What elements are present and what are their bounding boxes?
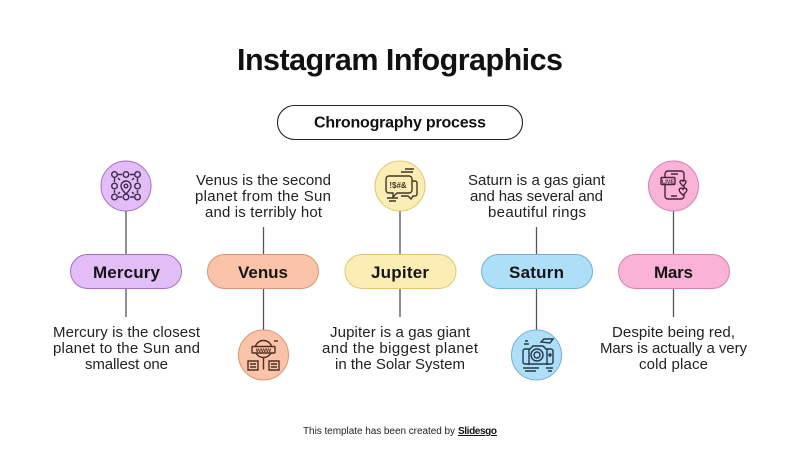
text: Mars description: Mars is actually a very xyxy=(600,340,748,357)
label pill: Jupiter: Jupiter xyxy=(371,263,429,282)
label pill: Mercury: Mercury xyxy=(93,263,161,282)
column: Venus xyxy=(195,172,331,380)
text: Mercury description: Mercury is the closest xyxy=(53,324,201,341)
subtitle pill: Chronography process xyxy=(314,114,486,132)
label pill: Jupiter xyxy=(345,254,456,288)
label pill: Saturn xyxy=(482,254,592,288)
label pill: Venus: Venus xyxy=(238,263,288,282)
icon: Mars live phone xyxy=(648,161,698,211)
icon: Jupiter speech bubbles: !$#& xyxy=(389,181,407,190)
footer credit: This template has been created by xyxy=(303,426,455,437)
label pill: Saturn: Saturn xyxy=(509,263,564,282)
text: Jupiter description: Jupiter is a gas giant xyxy=(330,324,471,341)
icon: Jupiter speech bubbles xyxy=(375,161,425,211)
label pill: Mars: Mars xyxy=(654,263,693,282)
icon: Mercury network pin xyxy=(101,161,151,211)
title: Instagram Infographics xyxy=(237,43,563,77)
text: Saturn description: Saturn is a gas giant xyxy=(468,172,606,189)
icon: Mars live phone: LIVE xyxy=(662,179,674,185)
column: Saturn xyxy=(468,172,606,380)
label pill: Venus xyxy=(208,254,318,288)
icon: Saturn camera xyxy=(512,330,562,380)
text: Venus description: Venus is the second xyxy=(196,172,331,189)
text: Saturn description xyxy=(468,172,606,221)
text: Mercury description xyxy=(53,324,201,373)
text: Mars description: Despite being red, xyxy=(612,324,735,341)
text: Mars description xyxy=(600,324,748,373)
text: Saturn description: beautiful rings xyxy=(488,204,586,221)
column: Mars xyxy=(600,161,748,373)
text: Saturn description: and has several and xyxy=(470,188,603,205)
text: Mercury description: smallest one xyxy=(85,356,168,373)
label pill: Mars xyxy=(618,254,730,288)
column: Jupiter xyxy=(322,161,479,373)
text: Mars description: cold place xyxy=(639,356,708,373)
subtitle pill xyxy=(278,106,522,140)
text: Jupiter description xyxy=(322,324,479,373)
icon: Venus www magnifier: www xyxy=(255,347,272,354)
column: Mercury xyxy=(53,161,201,373)
label pill: Mercury xyxy=(70,254,182,288)
text: Venus description: and is terribly hot xyxy=(205,204,323,221)
footer credit: Slidesgo xyxy=(458,426,497,437)
text: Jupiter description: and the biggest planet xyxy=(322,340,479,357)
text: Jupiter description: in the Solar System xyxy=(335,356,465,373)
text: Venus description: planet from the Sun xyxy=(195,188,331,205)
text: Venus description xyxy=(195,172,331,221)
icon: Venus www magnifier xyxy=(238,330,288,380)
text: Mercury description: planet to the Sun and xyxy=(53,340,200,357)
